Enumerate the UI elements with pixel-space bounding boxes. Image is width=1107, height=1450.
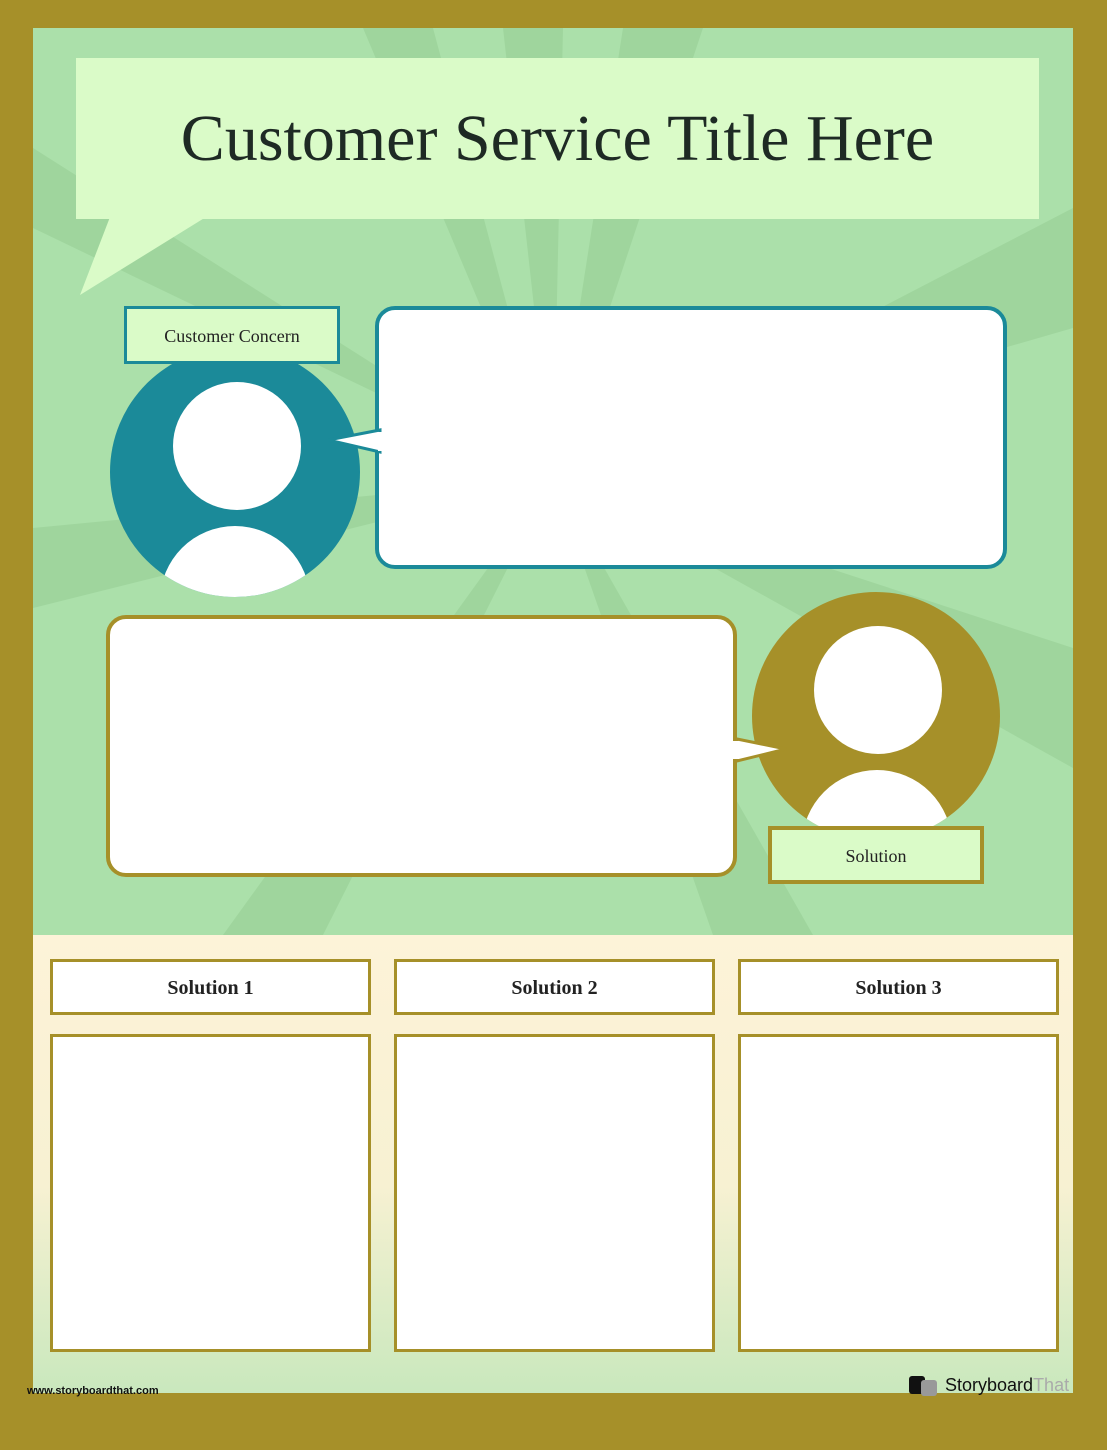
logo: StoryboardThat: [945, 1375, 1069, 1395]
solution 1 box: [50, 1034, 371, 1352]
solution label: [768, 826, 984, 884]
footer url: www.storyboardthat.com: [27, 1385, 159, 1397]
solution avatar: [752, 592, 1000, 840]
solution 3 header: [738, 959, 1059, 1015]
customer concern label: Customer Concern: [164, 326, 300, 346]
solution 2 box: [394, 1034, 715, 1352]
solution speech bubble: [106, 615, 780, 877]
solution 3 box: [738, 1034, 1059, 1352]
title speech box: [76, 58, 1039, 295]
solution 1 header: [50, 959, 371, 1015]
solution 2 header: Solution 2: [511, 977, 598, 999]
customer avatar: [110, 347, 360, 597]
solution 3 header: Solution 3: [855, 977, 942, 999]
solution 2 header: [394, 959, 715, 1015]
solution label: Solution: [845, 846, 906, 866]
customer speech bubble: [335, 306, 1007, 569]
title: Customer Service Title Here: [181, 102, 934, 175]
customer concern label: [124, 306, 340, 364]
solution 1 header: Solution 1: [167, 977, 254, 999]
